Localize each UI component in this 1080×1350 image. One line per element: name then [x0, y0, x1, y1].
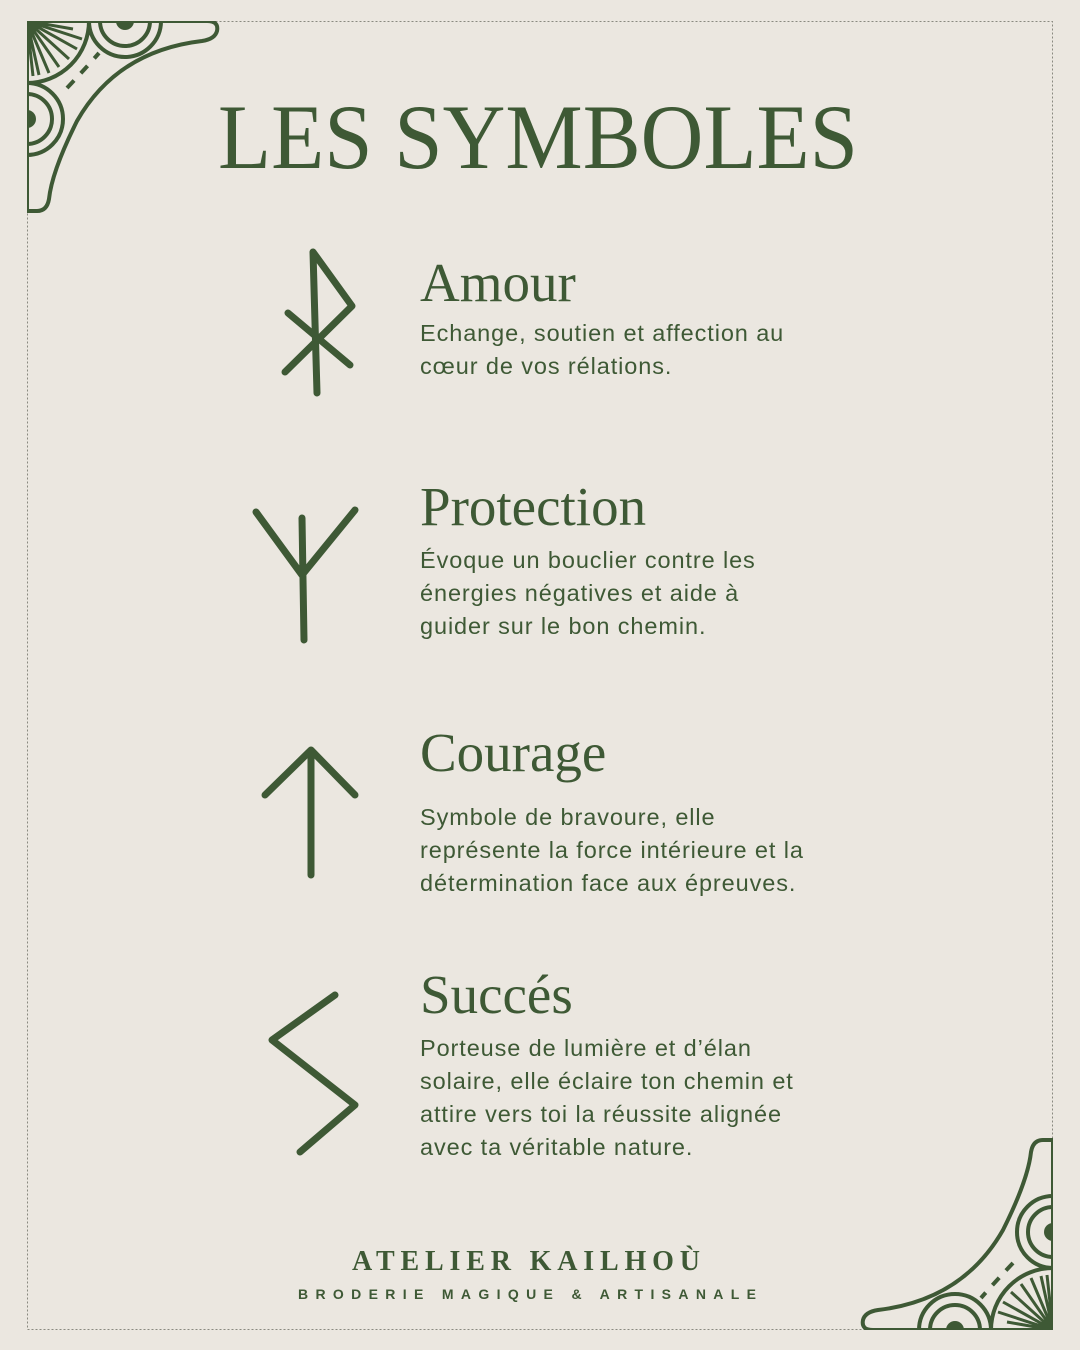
corner ornament top-left: [18, 12, 217, 211]
footer brand: [298, 1246, 756, 1302]
title: LES SYMBOLES: [218, 86, 858, 188]
text: courage: Symbole de bravoure, elle: [420, 804, 716, 830]
rune: protection: [256, 510, 355, 640]
heading: courage: Courage: [420, 722, 606, 783]
text: succes: [420, 1035, 794, 1160]
text: succes: Porteuse de lumière et d’élan: [420, 1035, 752, 1061]
text: courage: représente la force intérieure et la: [420, 837, 804, 863]
rune: courage: [265, 750, 355, 875]
text: succes: avec ta véritable nature.: [420, 1134, 693, 1160]
rune: succes: [272, 995, 355, 1152]
heading: succes: Succés: [420, 964, 573, 1025]
rune: amour: [285, 252, 352, 393]
text: amour: cœur de vos rélations.: [420, 353, 672, 379]
footer brand: BRODERIE MAGIQUE & ARTISANALE: [298, 1286, 756, 1302]
text: courage: détermination face aux épreuves.: [420, 870, 796, 896]
text: amour: [420, 320, 784, 379]
corner ornament bottom-right: [863, 1140, 1062, 1339]
heading: protection: Protection: [420, 476, 646, 537]
text: courage: [420, 804, 804, 896]
text: protection: guider sur le bon chemin.: [420, 613, 706, 639]
text: succes: attire vers toi la réussite alignée: [420, 1101, 782, 1127]
text: amour: Echange, soutien et affection au: [420, 320, 784, 346]
text: succes: solaire, elle éclaire ton chemin et: [420, 1068, 794, 1094]
heading: amour: Amour: [420, 252, 576, 313]
text: protection: [420, 547, 756, 639]
footer brand: ATELIER KAILHOÙ: [352, 1246, 700, 1277]
text: protection: énergies négatives et aide à: [420, 580, 739, 606]
text: protection: Évoque un bouclier contre les: [420, 547, 756, 573]
